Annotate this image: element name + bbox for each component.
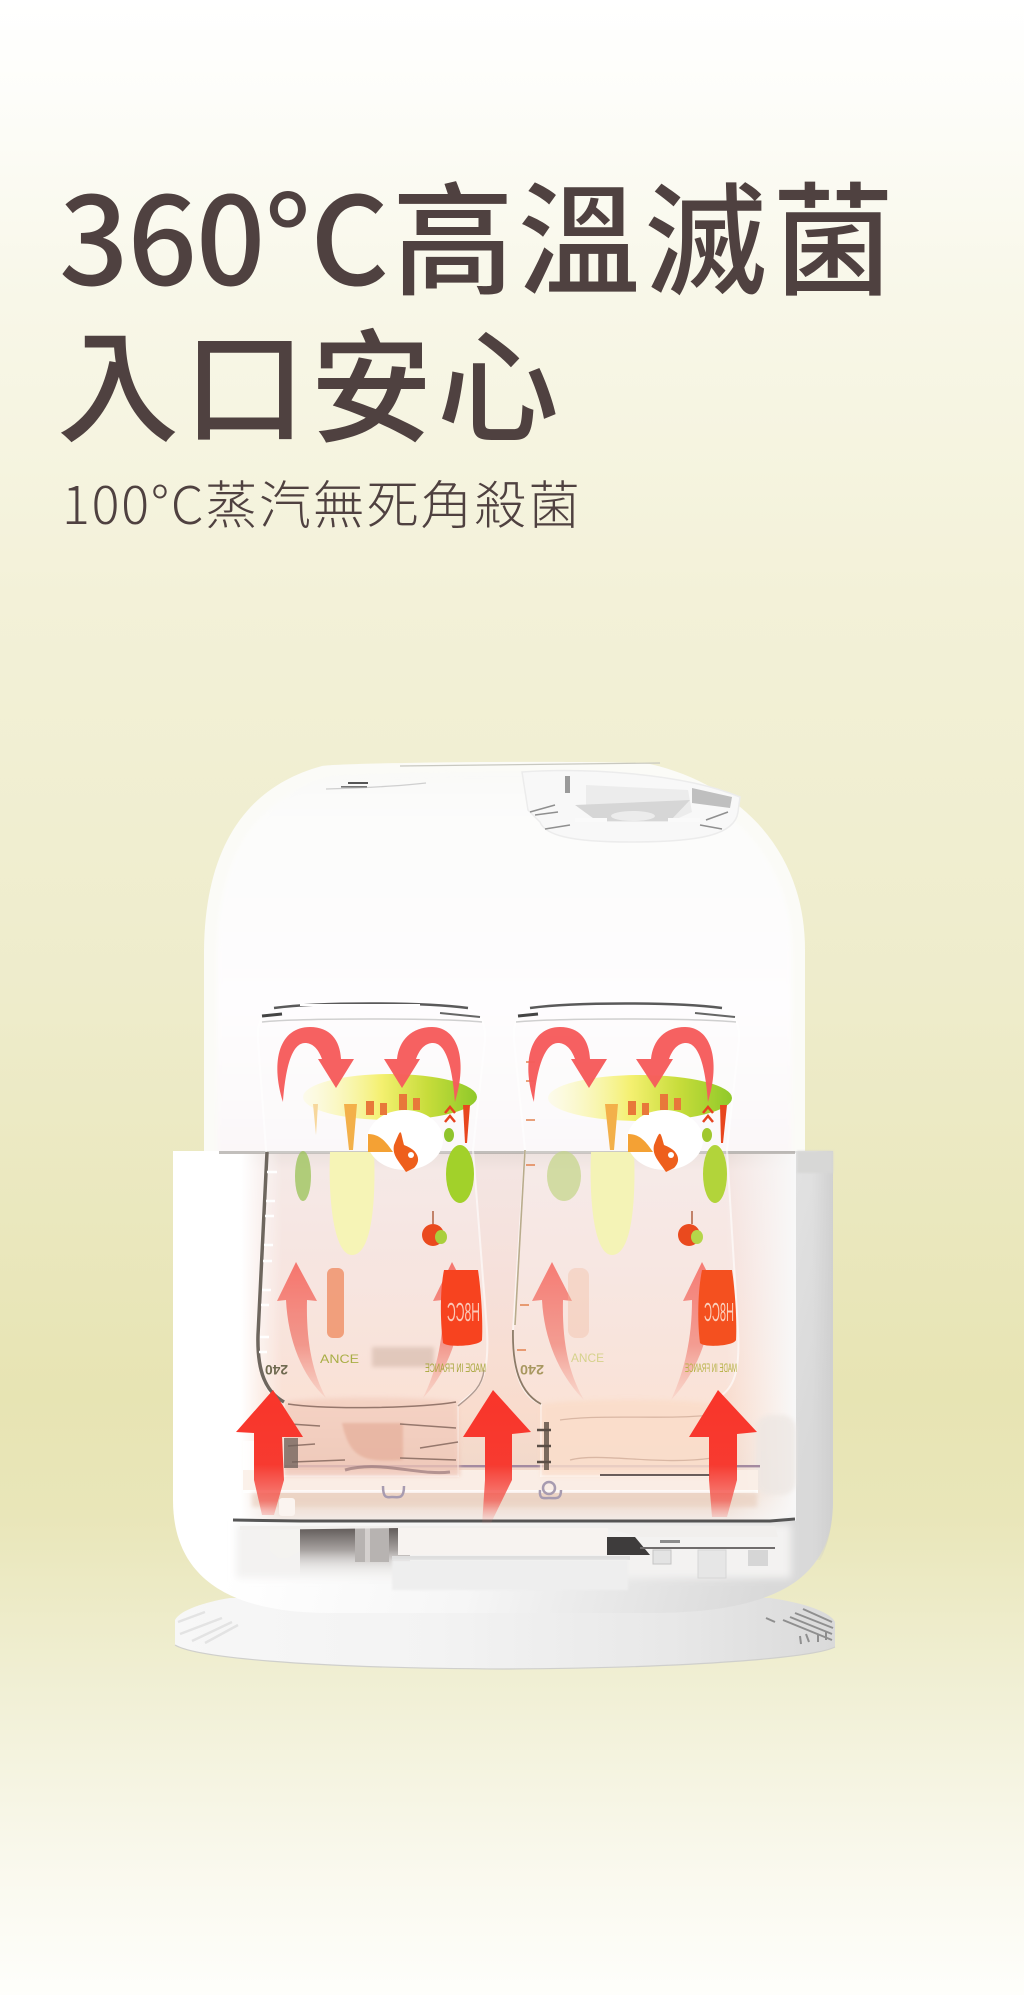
glass rim right — [516, 1004, 736, 1022]
rising arrow 3 — [532, 1262, 584, 1400]
rising arrow 1 — [277, 1262, 326, 1398]
vent ridges left — [178, 1612, 238, 1643]
title line 1: 溫 — [518, 144, 640, 321]
bottle right — [513, 1002, 739, 1476]
steriliser product illustration — [173, 762, 835, 1669]
fruit decal — [422, 1211, 447, 1246]
transparent lid — [204, 762, 805, 1160]
title line 1: 高 — [392, 144, 514, 321]
arrows: rising steam in bottles — [277, 1262, 722, 1400]
base disc — [175, 1598, 835, 1669]
mirrored bottle text: MADE IN FRANCE — [425, 1361, 486, 1375]
top right rim grey — [797, 1151, 833, 1173]
mirrored bottle text right: ANCE — [571, 1351, 604, 1365]
subtitle: 100°C蒸汽無死角殺菌 — [62, 464, 580, 539]
mirrored bottle text right: MADE IN FRANCE — [685, 1361, 737, 1375]
glass rim — [262, 1004, 482, 1022]
tray — [243, 1441, 760, 1516]
mechanical parts under chamber — [233, 1519, 795, 1590]
right chamber blob — [756, 1415, 796, 1495]
pink inner chamber — [212, 1151, 796, 1521]
lid cap valve — [522, 771, 740, 842]
red label right: H8CC — [704, 1297, 734, 1327]
base arrow right — [689, 1390, 757, 1517]
lid small mark — [326, 782, 426, 789]
curved arrow 3 — [528, 1027, 607, 1102]
arrows: upper curved steam — [277, 1027, 714, 1102]
red label: H8CC — [447, 1297, 480, 1327]
curved arrow 2 — [384, 1027, 461, 1102]
main base body — [173, 1151, 833, 1613]
bottle right artwork — [547, 1075, 736, 1346]
red label — [441, 1270, 482, 1346]
red label right — [698, 1270, 736, 1346]
neck thread right — [537, 1415, 712, 1475]
curved arrow 4 — [636, 1027, 714, 1102]
rising arrow 2 — [423, 1262, 472, 1398]
volume scale — [259, 1172, 277, 1352]
title line 1: 滅 — [645, 144, 767, 321]
right rim shadow — [812, 1151, 833, 1560]
left bottle neck — [284, 1398, 460, 1476]
mirrored bottle text right — [520, 1351, 737, 1378]
mirrored bottle text — [265, 1352, 486, 1378]
fruit decal right — [678, 1211, 703, 1246]
rising arrow 4 — [671, 1262, 722, 1400]
chamber floor line — [233, 1519, 795, 1521]
bottle left artwork — [295, 1074, 482, 1367]
volume scale right — [517, 1062, 535, 1350]
title line 1: 菌 — [772, 144, 894, 321]
tray feet — [383, 1482, 561, 1498]
curved arrow 1 — [277, 1027, 354, 1102]
base arrow left — [236, 1390, 303, 1515]
bottle left — [257, 1002, 487, 1476]
mirrored bottle text: 240 — [265, 1362, 288, 1378]
vent ridges right — [766, 1609, 833, 1644]
right bottle neck — [541, 1400, 712, 1476]
mirrored bottle text right: 240 — [520, 1362, 544, 1378]
bottle outline dark — [258, 1152, 284, 1402]
arrows: large base steam — [236, 1390, 757, 1525]
base arrow centre — [463, 1390, 531, 1525]
title line 2: 入口安心 — [57, 291, 559, 468]
mirrored bottle text: ANCE — [320, 1352, 359, 1366]
title line 1: 360°C — [59, 144, 389, 321]
title — [57, 144, 894, 468]
